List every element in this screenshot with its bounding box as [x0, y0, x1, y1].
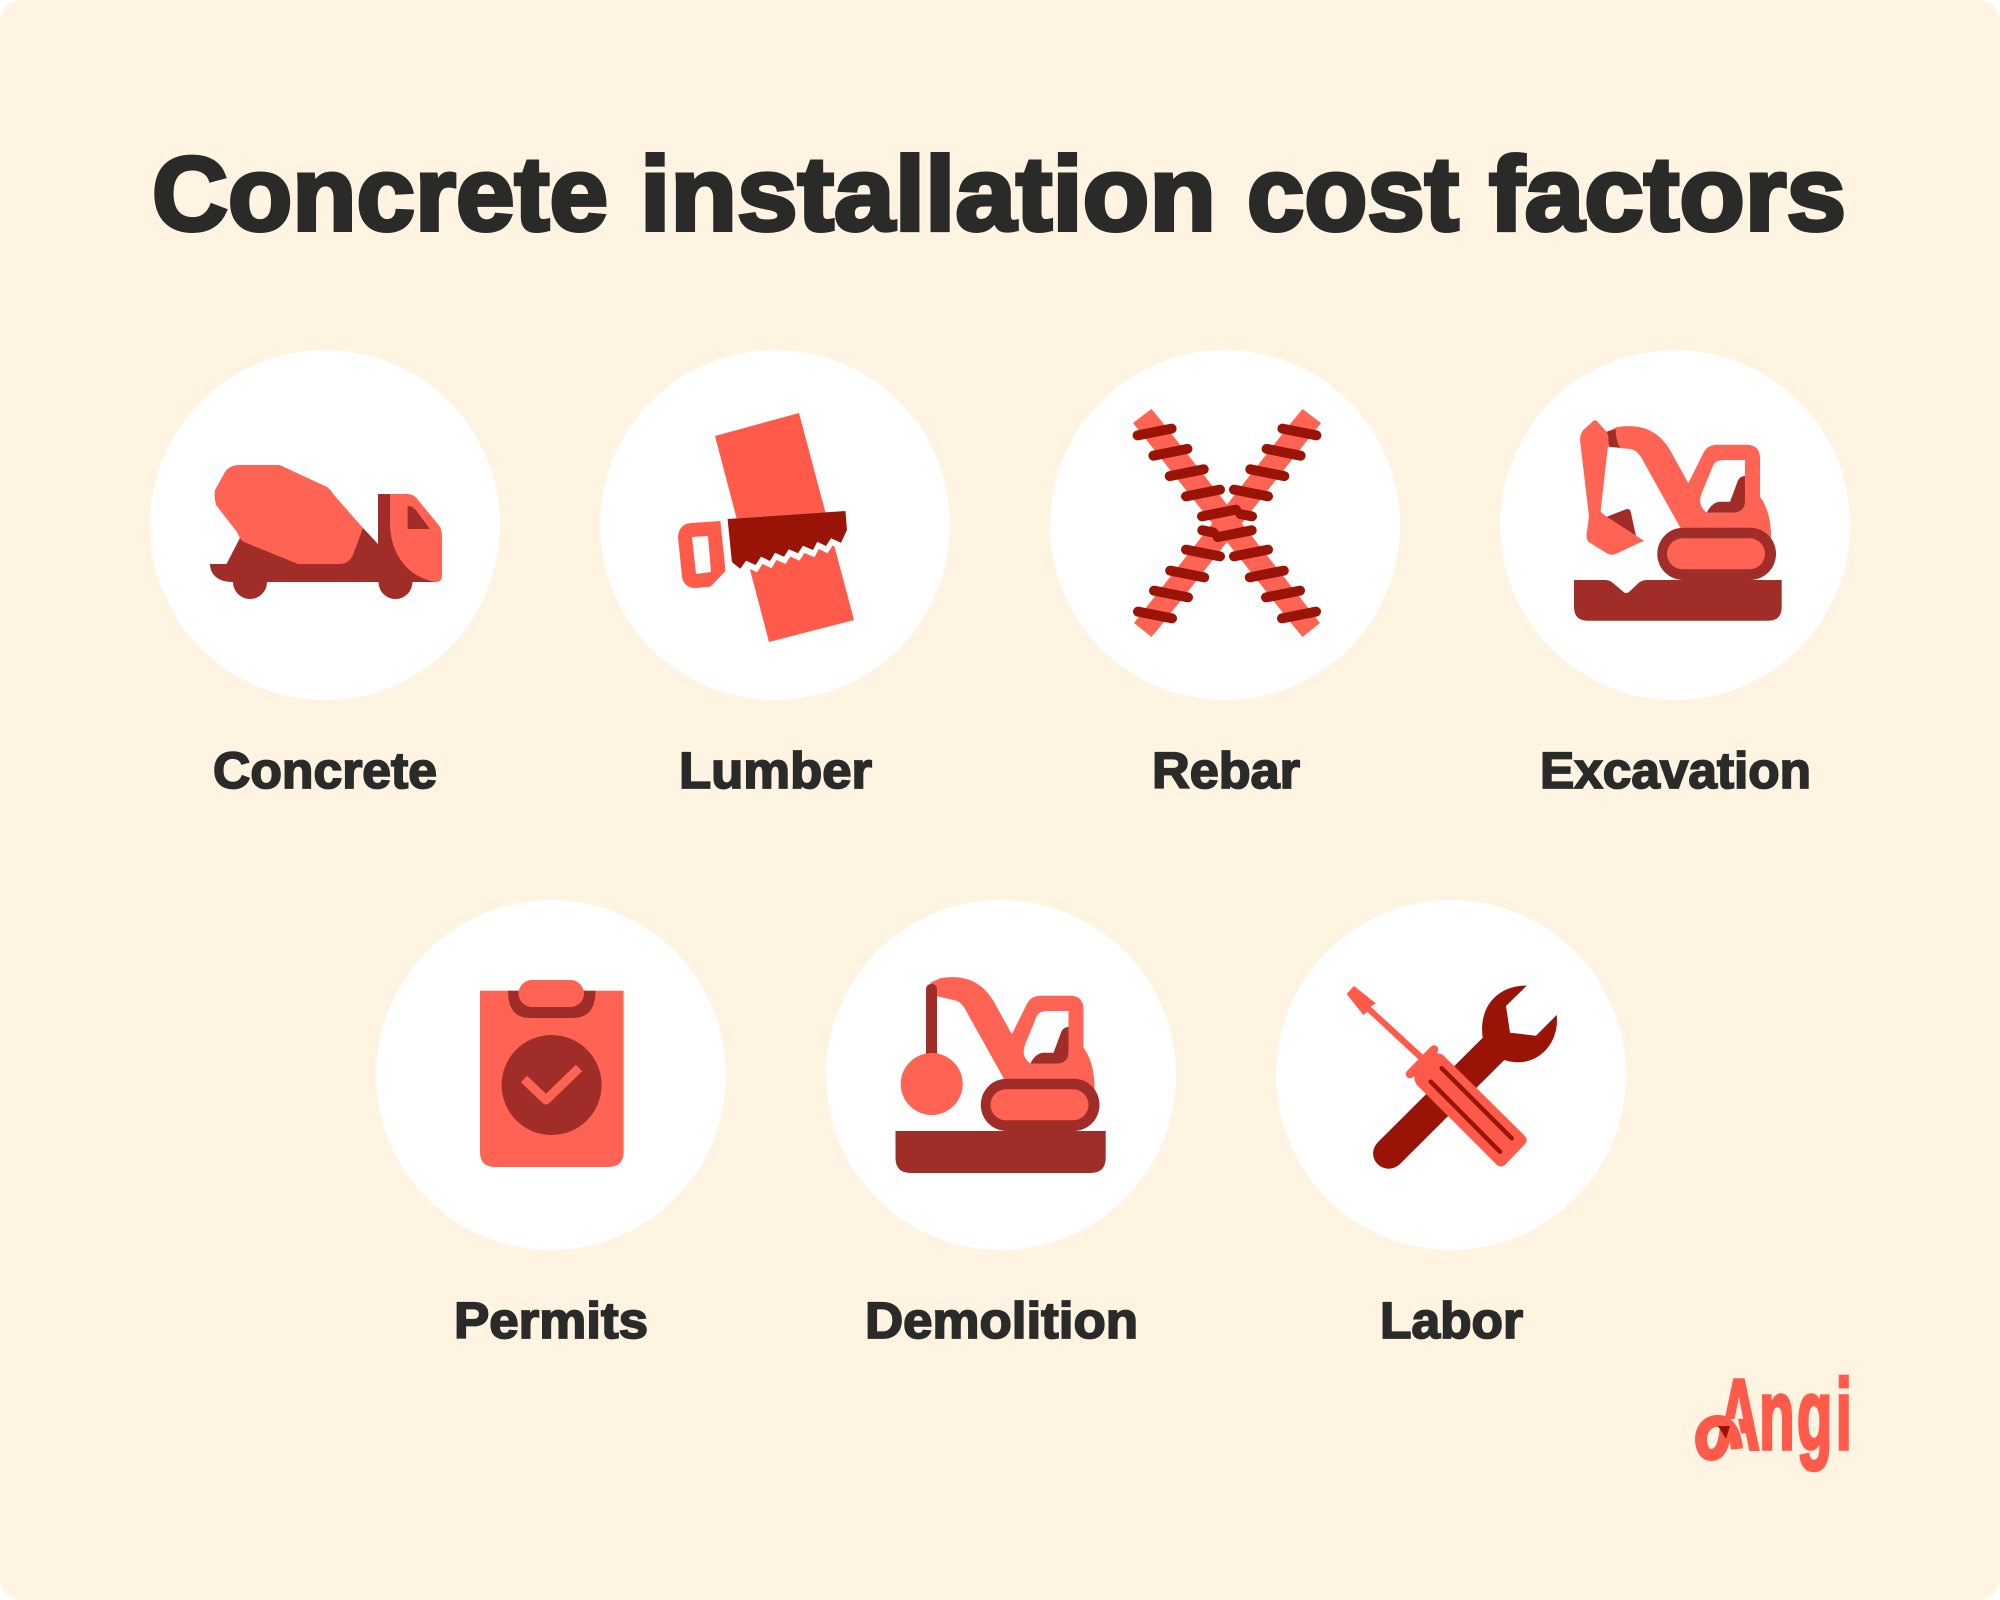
circle: demolition: [826, 900, 1176, 1250]
label: concrete: Concrete: [213, 742, 437, 799]
label: rebar: Rebar: [1152, 742, 1300, 799]
label: lumber: Lumber: [679, 742, 872, 799]
title: Concrete: [152, 136, 608, 253]
circle: rebar: [1050, 350, 1400, 700]
title: cost: [1247, 136, 1459, 253]
label: demolition: Demolition: [865, 1292, 1138, 1349]
panel: concrete: [150, 350, 500, 799]
icon: crossed wrench and screwdriver: [1347, 986, 1557, 1169]
logo: Angi: Angi: [1718, 1360, 1852, 1471]
title: installation: [640, 136, 1216, 253]
panel: lumber: [600, 350, 950, 799]
panel: labor: [1276, 900, 1626, 1349]
label: excavation: Excavation: [1540, 742, 1811, 799]
icon: excavator digging: [1574, 420, 1782, 621]
circle: concrete: [150, 350, 500, 700]
panel: rebar: [1050, 350, 1400, 799]
panel: excavation: [1500, 350, 1850, 799]
title: factors: [1489, 136, 1846, 253]
icon: excavator with wrecking ball: [896, 977, 1106, 1173]
icon: clipboard with checkmark: [480, 980, 624, 1167]
circle: lumber: [600, 350, 950, 700]
icon: cement mixer truck: [210, 465, 442, 599]
circle: labor: [1276, 900, 1626, 1250]
icon: board and saw: [678, 413, 854, 642]
panel: permits: [376, 900, 726, 1349]
label: permits: Permits: [454, 1292, 648, 1349]
title: [152, 136, 1846, 253]
circle: permits: [376, 900, 726, 1250]
icon: crossed rebar: [1133, 409, 1321, 637]
panel: demolition: [826, 900, 1176, 1349]
circle: excavation: [1500, 350, 1850, 700]
label: labor: Labor: [1380, 1292, 1523, 1349]
